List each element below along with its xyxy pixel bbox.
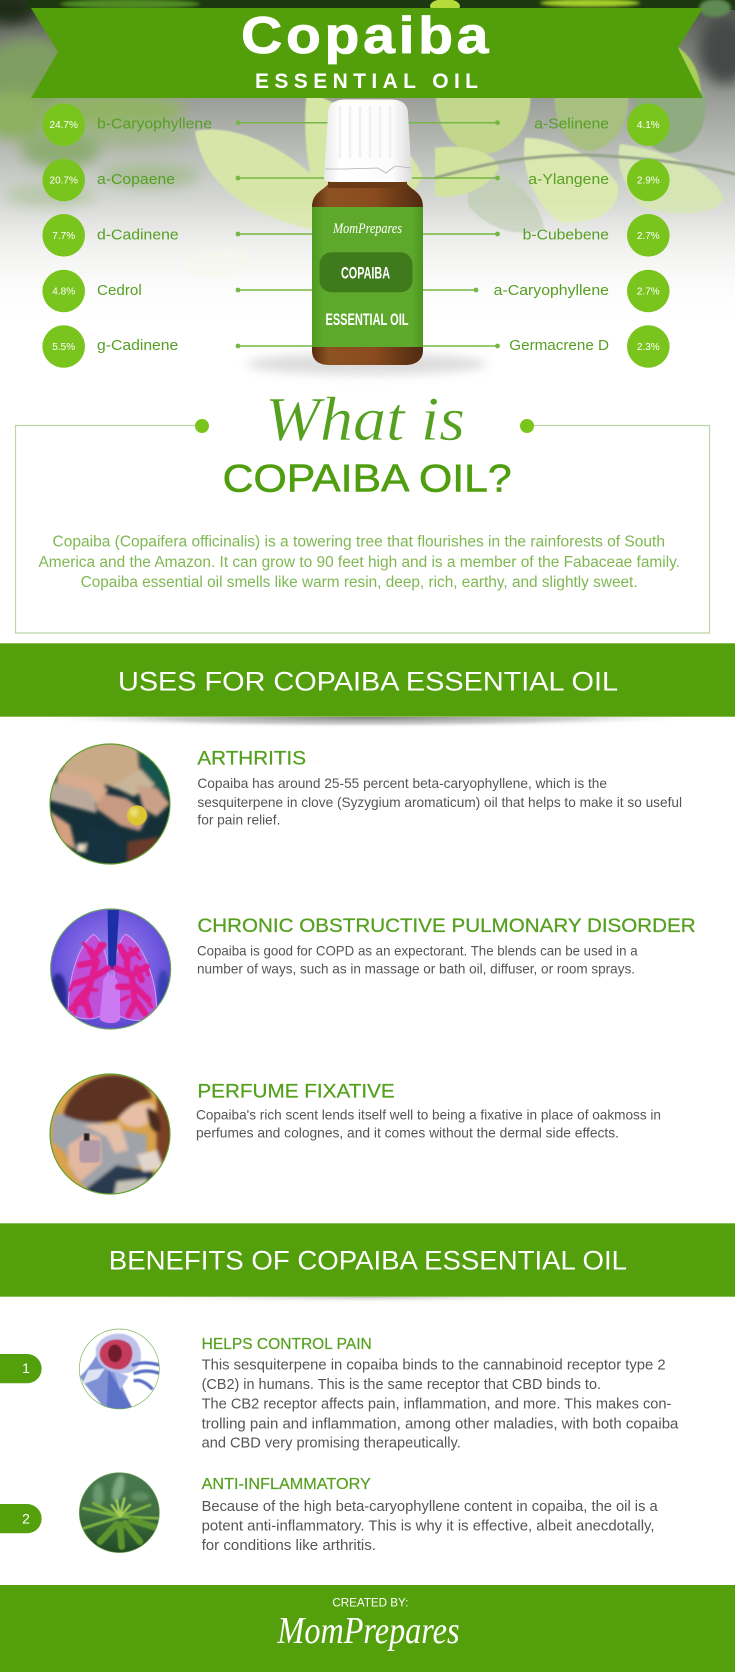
left composition list: d-Cadinene <box>97 226 179 243</box>
banner: uses <box>0 643 735 717</box>
right composition list: 2.7% <box>637 231 660 242</box>
left composition list: 7.7% <box>52 231 75 242</box>
number tab 2 <box>0 1504 42 1533</box>
connector lines <box>236 120 500 348</box>
body: Copaiba has around 25-55 percent beta-caryophyllene, which is the <box>197 775 607 791</box>
body: The CB2 receptor affects pain, inflammation, and more. This makes con- <box>202 1397 672 1413</box>
right composition list <box>494 103 670 368</box>
banner shadow <box>78 717 656 726</box>
label name: COPAIBA <box>341 263 390 282</box>
left composition list <box>42 103 212 368</box>
number tab 1 <box>0 1354 42 1383</box>
number tab 2: 2 <box>22 1510 30 1526</box>
body: and CBD very promising therapeutically. <box>202 1436 461 1452</box>
panel: what is copaiba oil <box>16 386 710 633</box>
bottle label <box>312 207 423 347</box>
heading: HELPS CONTROL PAIN <box>202 1336 372 1353</box>
title: Copaiba: Copaiba <box>241 6 489 64</box>
brand: MomPrepares <box>277 1610 460 1652</box>
body: for conditions like arthritis. <box>202 1538 376 1554</box>
right composition list: Germacrene D <box>509 337 609 354</box>
left composition list: 24.7% <box>50 120 78 131</box>
body: potent anti-inflammatory. This is why it is effective, albeit anecdotally, <box>202 1519 654 1535</box>
heading: ANTI-INFLAMMATORY <box>202 1476 371 1493</box>
benefit 2: anti-inflammatory <box>0 1470 659 1557</box>
number tab 1: 1 <box>22 1360 30 1376</box>
right composition list: 4.1% <box>637 120 660 131</box>
heading: ARTHRITIS <box>197 748 306 769</box>
banner shadow <box>196 1297 538 1301</box>
description: Copaiba essential oil smells like warm resin, deep, rich, earthy, and slightly sweet. <box>81 574 638 591</box>
left composition list: b-Caryophyllene <box>97 115 212 132</box>
body: sesquiterpene in clove (Syzygium aromaticum) oil that helps to make it so useful <box>197 794 682 810</box>
heading: COPAIBA OIL? <box>223 458 512 501</box>
body <box>197 943 638 977</box>
subtitle: Essential Oil: ESSENTIAL OIL <box>255 70 478 93</box>
right composition list: b-Cubebene <box>523 226 609 243</box>
photo: cannabis plant <box>79 1472 160 1553</box>
body: for pain relief. <box>197 812 280 828</box>
created by: CREATED BY: <box>332 1596 408 1610</box>
banner: benefits <box>0 1223 735 1297</box>
body: Because of the high beta-caryophyllene content in copaiba, the oil is a <box>202 1499 659 1515</box>
heading: CHRONIC OBSTRUCTIVE PULMONARY DISORDER <box>197 916 696 937</box>
leaves <box>194 47 735 233</box>
right composition list: 2.7% <box>637 286 660 298</box>
description <box>38 534 680 591</box>
body: Copaiba's rich scent lends itself well to being a fixative in place of oakmoss in <box>196 1106 661 1122</box>
body <box>202 1499 659 1554</box>
body <box>196 1106 661 1140</box>
benefit 1: pain control <box>0 1327 679 1452</box>
body: perfumes and colognes, and it comes without the dermal side effects. <box>196 1124 619 1140</box>
footer <box>0 1585 735 1672</box>
title banner <box>31 6 703 98</box>
bottle shadow <box>247 353 487 375</box>
banner: uses: USES FOR COPAIBA ESSENTIAL OIL <box>118 667 618 697</box>
label brand: MomPrepares <box>332 221 402 237</box>
body: Copaiba is good for COPD as an expectorant. The blends can be used in a <box>197 943 638 959</box>
label type: ESSENTIAL OIL <box>326 310 408 329</box>
left composition list: g-Cadinene <box>97 337 178 354</box>
left composition list: a-Copaene <box>97 171 175 188</box>
photo: hands with ball <box>47 742 173 868</box>
body <box>197 775 682 828</box>
body: (CB2) in humans. This is the same receptor that CBD binds to. <box>202 1377 601 1393</box>
body: This sesquiterpene in copaiba binds to the cannabinoid receptor type 2 <box>202 1357 666 1373</box>
essential oil bottle <box>312 100 423 365</box>
photo: brain <box>79 1328 160 1410</box>
right composition list: 2.9% <box>637 176 660 186</box>
description: Copaiba (Copaifera officinalis) is a towering tree that flourishes in the rainforests of South <box>52 534 665 551</box>
use: arthritis <box>47 742 682 868</box>
header photo background: blurred leaves <box>0 0 735 278</box>
label pill <box>320 252 412 292</box>
right composition list: a-Selinene <box>534 115 609 132</box>
description: America and the Amazon. It can grow to 90 feet high and is a member of the Fabaceae family. <box>38 554 680 571</box>
right composition list: a-Caryophyllene <box>494 282 609 299</box>
heading: PERFUME FIXATIVE <box>197 1082 395 1103</box>
body: number of ways, such as in massage or bath oil, diffuser, or room sprays. <box>197 961 635 977</box>
body: trolling pain and inflammation, among other maladies, with both copaiba <box>202 1416 679 1432</box>
bottle cap <box>324 100 412 182</box>
photo: lungs <box>47 907 173 1033</box>
use: perfume fixative <box>47 1072 661 1198</box>
photo: woman spraying perfume <box>47 1072 173 1198</box>
body <box>202 1357 679 1452</box>
left composition list: 20.7% <box>50 176 78 186</box>
left composition list: 4.8% <box>52 286 75 298</box>
use: copd <box>47 907 696 1033</box>
script heading: What is <box>265 386 465 454</box>
right composition list: 2.3% <box>637 342 660 353</box>
left composition list: Cedrol <box>97 282 142 299</box>
left composition list: 5.5% <box>52 342 75 353</box>
right composition list: a-Ylangene <box>528 171 609 188</box>
banner: benefits: BENEFITS OF COPAIBA ESSENTIAL OIL <box>109 1246 627 1276</box>
